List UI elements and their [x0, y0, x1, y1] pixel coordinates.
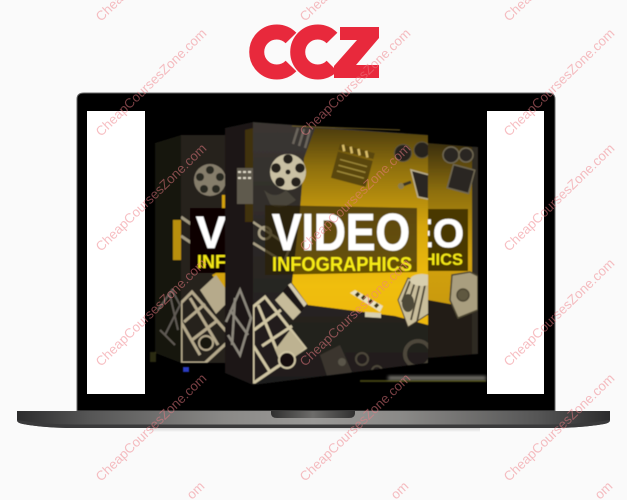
- watermark column 3: CheapCoursesZone.com: [501, 371, 617, 484]
- top film strip: [293, 128, 310, 148]
- watermark column 3: CheapCoursesZone.com: [501, 256, 617, 369]
- watermark column 1: CheapCoursesZone.com: [93, 26, 209, 139]
- main box: [225, 122, 434, 385]
- left spine lattice: [158, 290, 180, 345]
- spine clapper detail: [237, 168, 253, 204]
- left title band: [189, 208, 226, 274]
- olive reflection line: [360, 380, 486, 382]
- watermark column 1: CheapCoursesZone.com: [93, 256, 209, 369]
- right popcorn icon: [450, 272, 478, 318]
- vintage camera icon: [253, 283, 307, 382]
- watermark column 3: [501, 0, 617, 500]
- white screen strip right: [487, 111, 544, 394]
- watermark column 1: CheapCoursesZone.com: [93, 141, 209, 254]
- right box edge: [472, 147, 478, 354]
- laptop: [17, 93, 610, 432]
- popcorn box icon: [398, 274, 434, 327]
- watermark column 2: [297, 0, 413, 500]
- bottom reels and lens detail: [320, 338, 428, 376]
- watermark column 1: CheapCoursesZone.com: [93, 371, 209, 484]
- right box dark base: [428, 143, 478, 358]
- laptop base shadow: [150, 427, 480, 432]
- left box spine: [155, 135, 181, 363]
- yellow panel: [292, 128, 428, 325]
- left vintage camera icon: [181, 275, 232, 363]
- watermark column 2: CheapCoursesZone.com: [297, 141, 413, 254]
- title band: [265, 205, 417, 275]
- camera body cream panel: [276, 330, 304, 356]
- watermark left edge fragments: [0, 130, 2, 493]
- screen artefact smear: [388, 376, 486, 380]
- back left box: [154, 134, 226, 364]
- watermark column 2: CheapCoursesZone.com: [297, 371, 413, 484]
- logo letter C left: [257, 32, 291, 72]
- main box spine: [225, 122, 253, 385]
- artefact blue ticks: [183, 367, 189, 372]
- camera lattice: [253, 305, 292, 372]
- white screen strip left: [87, 111, 145, 394]
- left VIDEO title: VIDEO: [196, 207, 336, 258]
- base lower edge: [17, 420, 610, 428]
- left spine yellow stripe: [173, 220, 181, 260]
- watermark column 3: CheapCoursesZone.com: [501, 141, 617, 254]
- main box top edge glint: [292, 126, 400, 130]
- watermark column 1: [93, 0, 209, 500]
- clapperboard icon: [331, 144, 375, 187]
- right projector icon: [443, 147, 475, 193]
- film strip detail: [253, 222, 290, 262]
- laptop screen lid: [77, 93, 555, 411]
- watermark column 2: CheapCoursesZone.com: [297, 26, 413, 139]
- right INFOGRAPHICS title end: HICS: [424, 251, 463, 269]
- ticket strip icon: [350, 290, 383, 318]
- camera lens: [279, 352, 295, 368]
- film reel icon: [264, 154, 306, 207]
- right VIDEO title end: EO: [406, 212, 464, 256]
- watermark column 2: CheapCoursesZone.com: [297, 256, 413, 369]
- laptop notch: [271, 411, 355, 418]
- right title band: [428, 209, 468, 271]
- spine yellow fleck: [245, 128, 253, 222]
- logo letter Z: [334, 27, 379, 78]
- artefact olive band left: [150, 352, 156, 362]
- logo: CCZ: [257, 27, 379, 78]
- logo letter C right: [298, 32, 332, 72]
- product boxes: [150, 122, 486, 385]
- camera lens barrel: [283, 286, 304, 310]
- INFOGRAPHICS title: INFOGRAPHICS: [272, 254, 412, 276]
- film projector icon: [394, 142, 433, 200]
- left INFOGRAPHICS title: INFOGRAPHICS: [197, 252, 335, 272]
- left film reel icon: [194, 164, 226, 196]
- camera body: [253, 297, 305, 382]
- right box yellow panel: [428, 143, 472, 308]
- back right box: [427, 142, 478, 358]
- main box front: [253, 122, 434, 385]
- laptop base: [17, 411, 610, 428]
- VIDEO title: VIDEO: [272, 204, 410, 262]
- left film strip: [180, 215, 191, 244]
- left box front: [180, 134, 226, 364]
- watermark column 3: CheapCoursesZone.com: [501, 26, 617, 139]
- spine lattice detail: [226, 290, 251, 355]
